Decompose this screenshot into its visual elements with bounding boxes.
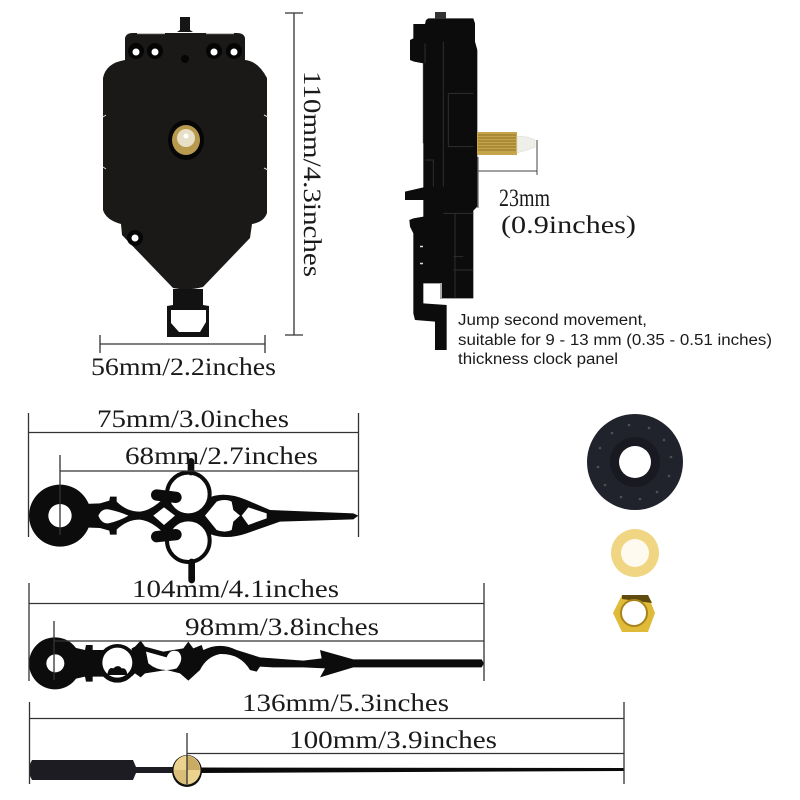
label: 100mm: 100mm/3.9inches bbox=[289, 725, 497, 754]
side details bbox=[423, 42, 473, 298]
text: movement description: suitable for 9 - 13 mm (0.35 - 0.51 inches) bbox=[458, 332, 772, 349]
label: 68mm: 68mm/2.7inches bbox=[125, 441, 318, 470]
icon: top pin bbox=[177, 17, 193, 32]
mounting holes bbox=[127, 43, 242, 246]
label: 104mm: 104mm/4.1inches bbox=[132, 574, 339, 603]
icon: brass washer bbox=[611, 529, 659, 577]
icon: threaded shaft bbox=[477, 132, 535, 155]
top pin bbox=[435, 12, 446, 19]
hand shape bbox=[29, 461, 358, 580]
icon: black rubber washer bbox=[587, 414, 683, 510]
edge notches bbox=[103, 34, 268, 170]
side silhouette bbox=[405, 18, 477, 350]
hand shape bbox=[29, 637, 484, 689]
panel: movement side view bbox=[405, 12, 636, 350]
label: 75mm: 75mm/3.0inches bbox=[97, 404, 289, 433]
icon: brass shaft bbox=[168, 120, 204, 160]
icon: brass hex nut bbox=[613, 595, 655, 632]
pendulum slots bbox=[420, 246, 441, 298]
panel: second hand bbox=[30, 688, 624, 787]
dimension: height: 110mm/4.3inches bbox=[298, 71, 327, 277]
label: 98mm: 98mm/3.8inches bbox=[185, 612, 379, 641]
label: 23mm: 23mm bbox=[499, 183, 550, 212]
text: movement description: Jump second movement, bbox=[458, 312, 647, 329]
dimension lines bbox=[29, 583, 484, 681]
movement body bbox=[103, 33, 267, 289]
dimension lines bbox=[478, 140, 537, 208]
icon: brass hub bbox=[172, 755, 202, 787]
dimension: height bbox=[285, 13, 327, 335]
text: movement description bbox=[458, 312, 772, 368]
long needle bbox=[198, 768, 624, 773]
dimension: width: 56mm/2.2inches bbox=[91, 352, 276, 381]
panel: minute hand bbox=[29, 574, 484, 689]
counterweight bbox=[30, 760, 175, 780]
text: movement description: thickness clock panel bbox=[458, 351, 618, 368]
dimension lines bbox=[28, 413, 358, 537]
label: 0.9 inches: (0.9inches) bbox=[501, 210, 636, 239]
dimension lines bbox=[30, 702, 624, 784]
panel: movement back view bbox=[103, 17, 268, 337]
pendulum holder bbox=[167, 289, 209, 337]
label: 136mm: 136mm/5.3inches bbox=[242, 688, 449, 717]
dimension: width bbox=[91, 335, 276, 381]
panel: hour hand bbox=[28, 404, 358, 580]
